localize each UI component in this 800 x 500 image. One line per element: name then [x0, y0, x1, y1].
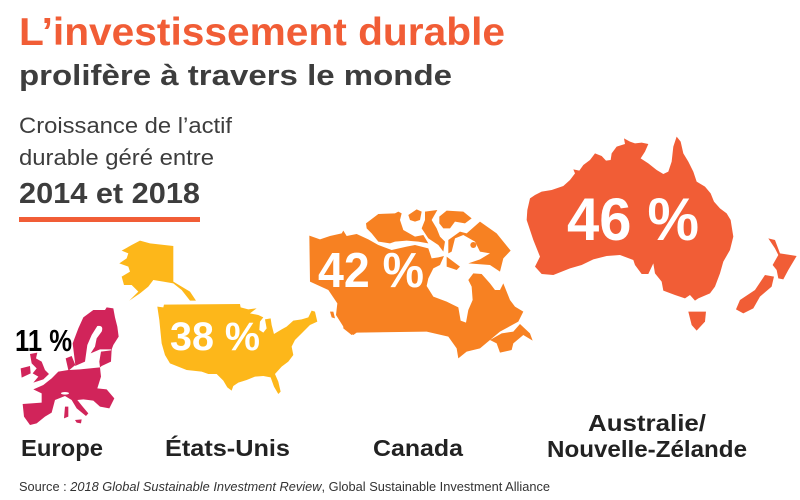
label: Australia and New Zealand: Australie/	[588, 410, 707, 436]
subtitle text: Croissance de l’actif	[19, 113, 233, 138]
Alaska	[119, 241, 196, 301]
label: Australia and New Zealand	[547, 410, 747, 462]
label: United States: États-Unis	[165, 434, 290, 461]
mainland	[309, 231, 533, 358]
Australia	[527, 137, 733, 301]
value: Canada: 42 %	[318, 244, 424, 298]
arctic islands	[366, 212, 428, 243]
source note: Source : 2018 Global Sustainable Investment Review , Global Sustainable Investment Alliance	[19, 480, 550, 494]
subtitle text	[19, 113, 233, 210]
New Zealand	[736, 238, 797, 313]
title: L’investissement durable	[19, 11, 505, 54]
contiguous states	[157, 304, 317, 394]
map: Canada	[309, 209, 533, 358]
title	[19, 11, 505, 92]
map: United States	[119, 241, 317, 394]
subtitle text: 2014 et 2018	[19, 178, 200, 210]
label: Canada: Canada	[373, 435, 463, 461]
label: Australia and New Zealand: Nouvelle-Zélande	[547, 436, 747, 462]
title: prolifère à travers le monde	[19, 60, 452, 92]
subtitle text: durable géré entre	[19, 145, 214, 170]
label: Europe: Europe	[21, 435, 103, 461]
value: United States: 38 %	[170, 315, 260, 359]
value: Europe: 11 %	[15, 323, 72, 358]
value: Australia and New Zealand: 46 %	[567, 186, 699, 253]
map: Australia and New Zealand	[527, 137, 797, 331]
map: Europe	[21, 307, 119, 425]
Tasmania	[688, 312, 706, 331]
subtitle underline	[19, 217, 200, 222]
